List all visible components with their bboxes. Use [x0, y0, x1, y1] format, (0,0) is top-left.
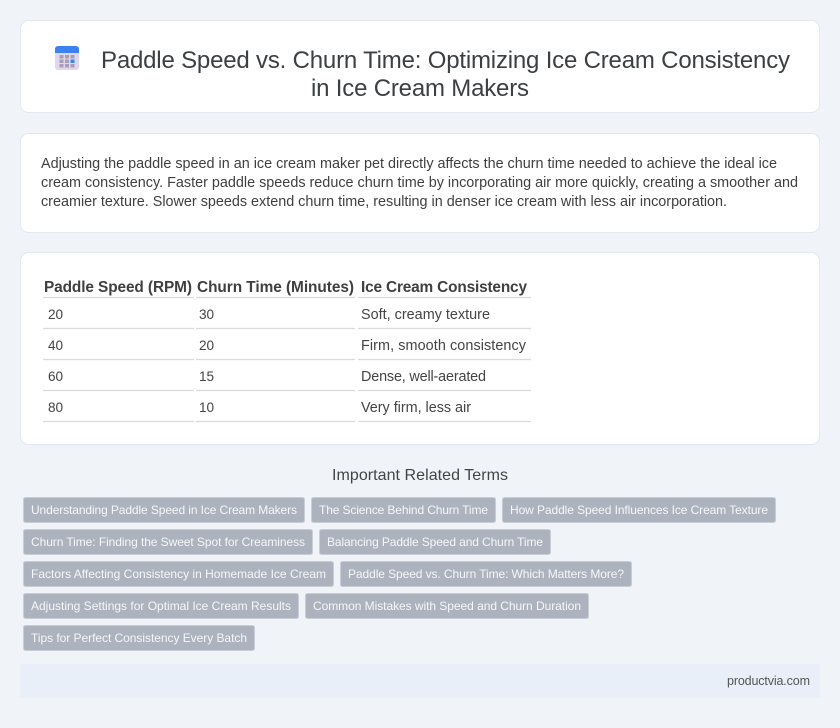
table row: 60 RPM: Dense, well-aerated: [361, 369, 486, 385]
panel: title card: [20, 20, 820, 112]
title: [101, 47, 790, 102]
icon: calendar grid: [55, 46, 79, 70]
tag: Balancing Paddle Speed and Churn Time: [327, 535, 543, 549]
table header: [44, 279, 527, 296]
tag: Understanding Paddle Speed in Ice Cream Makers: [31, 503, 297, 517]
tag: Factors Affecting Consistency in Homemade Ice Cream: [31, 567, 326, 581]
text block: paragraph: Adjusting the paddle speed in an ice cream maker pet directly affects the churn time needed to achieve the ideal ice: [41, 156, 777, 172]
table header: Churn Time (Minutes): [197, 279, 354, 296]
panel: intro paragraph: [20, 134, 820, 232]
tag: [340, 562, 632, 586]
table row: 20 RPM: Soft, creamy texture: [361, 307, 490, 323]
tag: [24, 626, 254, 650]
tag: [24, 530, 312, 554]
title: Paddle Speed vs. Churn Time: Optimizing Ice Cream Consistency: [101, 47, 790, 74]
text block: paragraph: cream consistency. Faster paddle speeds reduce churn time by incorporating air more quickly, creating a smoother and: [41, 175, 798, 191]
tag: Churn Time: Finding the Sweet Spot for Creaminess: [31, 535, 305, 549]
tag group: related terms: [24, 498, 776, 650]
heading: related terms: Important Related Terms: [332, 467, 508, 484]
tag: [306, 594, 588, 618]
table row: 80 RPM: [48, 400, 471, 416]
footer: productvia.com: [727, 674, 810, 688]
text block: paragraph: [41, 156, 798, 210]
tag: Paddle Speed vs. Churn Time: Which Matters More?: [348, 567, 624, 581]
footer: [20, 664, 820, 698]
tag: The Science Behind Churn Time: [319, 503, 488, 517]
table row: 60 RPM: 60: [48, 369, 63, 384]
table row: 20 RPM: 30: [199, 307, 214, 322]
panel: data table: [20, 252, 820, 444]
table row: 80 RPM: 80: [48, 400, 63, 415]
table header: Paddle Speed (RPM): [44, 279, 192, 296]
table row: 20 RPM: 20: [48, 307, 63, 322]
table row: 60 RPM: [48, 369, 486, 385]
table row: 40 RPM: 40: [48, 338, 63, 353]
table row: 80 RPM: 10: [199, 400, 214, 415]
title: in Ice Cream Makers: [311, 75, 529, 102]
table row: 20 RPM: [48, 307, 490, 323]
table row: 80 RPM: Very firm, less air: [361, 400, 471, 416]
tag: [24, 562, 334, 586]
tag: Adjusting Settings for Optimal Ice Cream Results: [31, 599, 291, 613]
tag: [502, 498, 776, 522]
tag: [24, 594, 298, 618]
table row: 40 RPM: Firm, smooth consistency: [361, 338, 527, 354]
tag: How Paddle Speed Influences Ice Cream Texture: [510, 503, 768, 517]
table row: 40 RPM: [48, 338, 527, 354]
table header: Ice Cream Consistency: [361, 279, 527, 296]
tag: [320, 530, 550, 554]
tag: [312, 498, 496, 522]
text block: paragraph: creamier texture. Slower speeds extend churn time, resulting in denser ice cream with less air incorporation.: [41, 194, 727, 210]
table row: 40 RPM: 20: [199, 338, 214, 353]
tag: [24, 498, 304, 522]
tag: Common Mistakes with Speed and Churn Duration: [313, 599, 581, 613]
tag: Tips for Perfect Consistency Every Batch: [31, 631, 247, 645]
table row: 60 RPM: 15: [199, 369, 214, 384]
